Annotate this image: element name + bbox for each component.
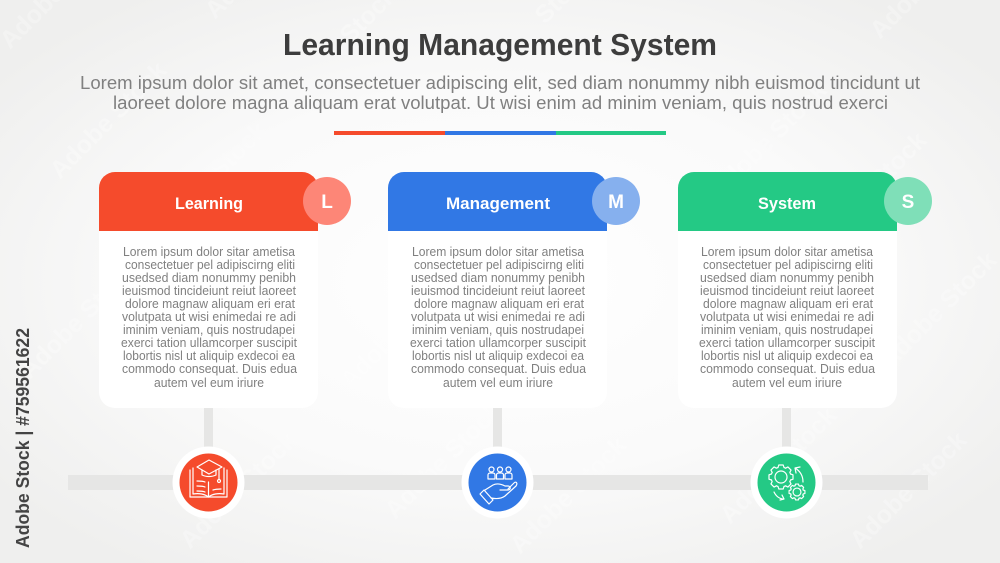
- text: Adobe Stock: [664, 266, 792, 394]
- stock id label: Adobe Stock | #759561622: [13, 328, 33, 548]
- body text: iminim veniam, quis nostrudapei: [701, 323, 873, 337]
- body text: lobortis nisl ut aliquip exdecoi ea: [412, 349, 584, 363]
- body text: usedsed diam nonummy penibh: [122, 271, 296, 285]
- body text: ieuismod tincideiunt reiut laoreet: [700, 284, 874, 298]
- body text: consectetuer pel adipiscirng eliti: [414, 258, 584, 272]
- body text: [410, 245, 587, 390]
- body text: volutpata ut wisi enimedai re adi: [122, 310, 296, 324]
- panel: management: [388, 172, 640, 518]
- subtitle text: laoreet dolore magna aliquam erat volutpat. Ut wisi enim ad minim veniam, quis nostrud exerci: [113, 93, 888, 113]
- body text: dolore magnaw aliquam eri erat: [703, 297, 874, 311]
- tricolor divider: [334, 131, 666, 135]
- body text: consectetuer pel adipiscirng eliti: [703, 258, 873, 272]
- letter badge: [303, 177, 351, 225]
- letter badge: L: [321, 192, 333, 213]
- text: Adobe Stock: [174, 426, 302, 554]
- body text: [699, 245, 876, 390]
- text: Adobe Stock: [504, 431, 632, 559]
- body text: usedsed diam nonummy penibh: [411, 271, 585, 285]
- card body: [99, 172, 318, 408]
- card header: [99, 172, 318, 231]
- letter badge: M: [608, 192, 624, 213]
- body text: consectetuer pel adipiscirng eliti: [125, 258, 295, 272]
- text: Adobe Stock: [44, 56, 172, 184]
- text: Stock: [864, 126, 932, 194]
- body text: iminim veniam, quis nostrudapei: [123, 323, 295, 337]
- letter badge: [592, 177, 640, 225]
- body text: autem vel eum iriure: [443, 376, 553, 390]
- body text: volutpata ut wisi enimedai re adi: [700, 310, 874, 324]
- body text: exerci tation ullamcorper suscipit: [410, 336, 587, 350]
- heading: Management: [446, 194, 550, 213]
- card header: [678, 172, 897, 231]
- icon: hand holding people: [462, 446, 534, 518]
- body text: dolore magnaw aliquam eri erat: [125, 297, 296, 311]
- body text: [121, 245, 298, 390]
- connector stem: [493, 408, 502, 458]
- body text: ieuismod tincideiunt reiut laoreet: [411, 284, 585, 298]
- text: Adobe Stock: [874, 246, 1000, 374]
- body text: exerci tation ullamcorper suscipit: [699, 336, 876, 350]
- subtitle text: [80, 73, 920, 113]
- body text: commodo consequat. Duis edua: [411, 362, 586, 376]
- body text: lobortis nisl ut aliquip exdecoi ea: [123, 349, 295, 363]
- body text: Lorem ipsum dolor sitar ametisa: [701, 245, 873, 259]
- heading: Learning: [175, 194, 243, 213]
- text: Stock: [204, 116, 272, 184]
- panel: system: [678, 172, 932, 518]
- body text: volutpata ut wisi enimedai re adi: [411, 310, 585, 324]
- body text: lobortis nisl ut aliquip exdecoi ea: [701, 349, 873, 363]
- title: Learning Management System: [283, 27, 717, 62]
- text: Adobe Stock: [704, 76, 832, 204]
- body text: exerci tation ullamcorper suscipit: [121, 336, 298, 350]
- card body: [388, 172, 607, 408]
- subtitle text: Lorem ipsum dolor sit amet, consectetuer adipiscing elit, sed diam nonummy nibh euismod tincidunt ut: [80, 73, 920, 93]
- text: Adobe Stock: [334, 266, 462, 394]
- timeline bar: [68, 475, 928, 490]
- body text: iminim veniam, quis nostrudapei: [412, 323, 584, 337]
- letter badge: S: [902, 192, 914, 213]
- panel: learning: [99, 172, 351, 518]
- body text: Lorem ipsum dolor sitar ametisa: [412, 245, 584, 259]
- text: Adobe Stock: [714, 401, 842, 529]
- icon: book and graduation cap: [172, 446, 244, 518]
- card body: [678, 172, 897, 408]
- body text: dolore magnaw aliquam eri erat: [414, 297, 585, 311]
- text: Adobe Stock: [379, 396, 507, 524]
- connector stem: [782, 408, 791, 458]
- text: Adobe Stock: [844, 426, 972, 554]
- card header: [388, 172, 607, 231]
- body text: autem vel eum iriure: [732, 376, 842, 390]
- body text: Lorem ipsum dolor sitar ametisa: [123, 245, 295, 259]
- letter badge: [884, 177, 932, 225]
- heading: System: [758, 194, 816, 213]
- icon: gears with arrows: [750, 446, 822, 518]
- connector stem: [204, 408, 213, 458]
- text: Adobe Stock: [14, 256, 142, 384]
- body text: usedsed diam nonummy penibh: [700, 271, 874, 285]
- body text: ieuismod tincideiunt reiut laoreet: [122, 284, 296, 298]
- body text: commodo consequat. Duis edua: [700, 362, 875, 376]
- body text: autem vel eum iriure: [154, 376, 264, 390]
- body text: commodo consequat. Duis edua: [122, 362, 297, 376]
